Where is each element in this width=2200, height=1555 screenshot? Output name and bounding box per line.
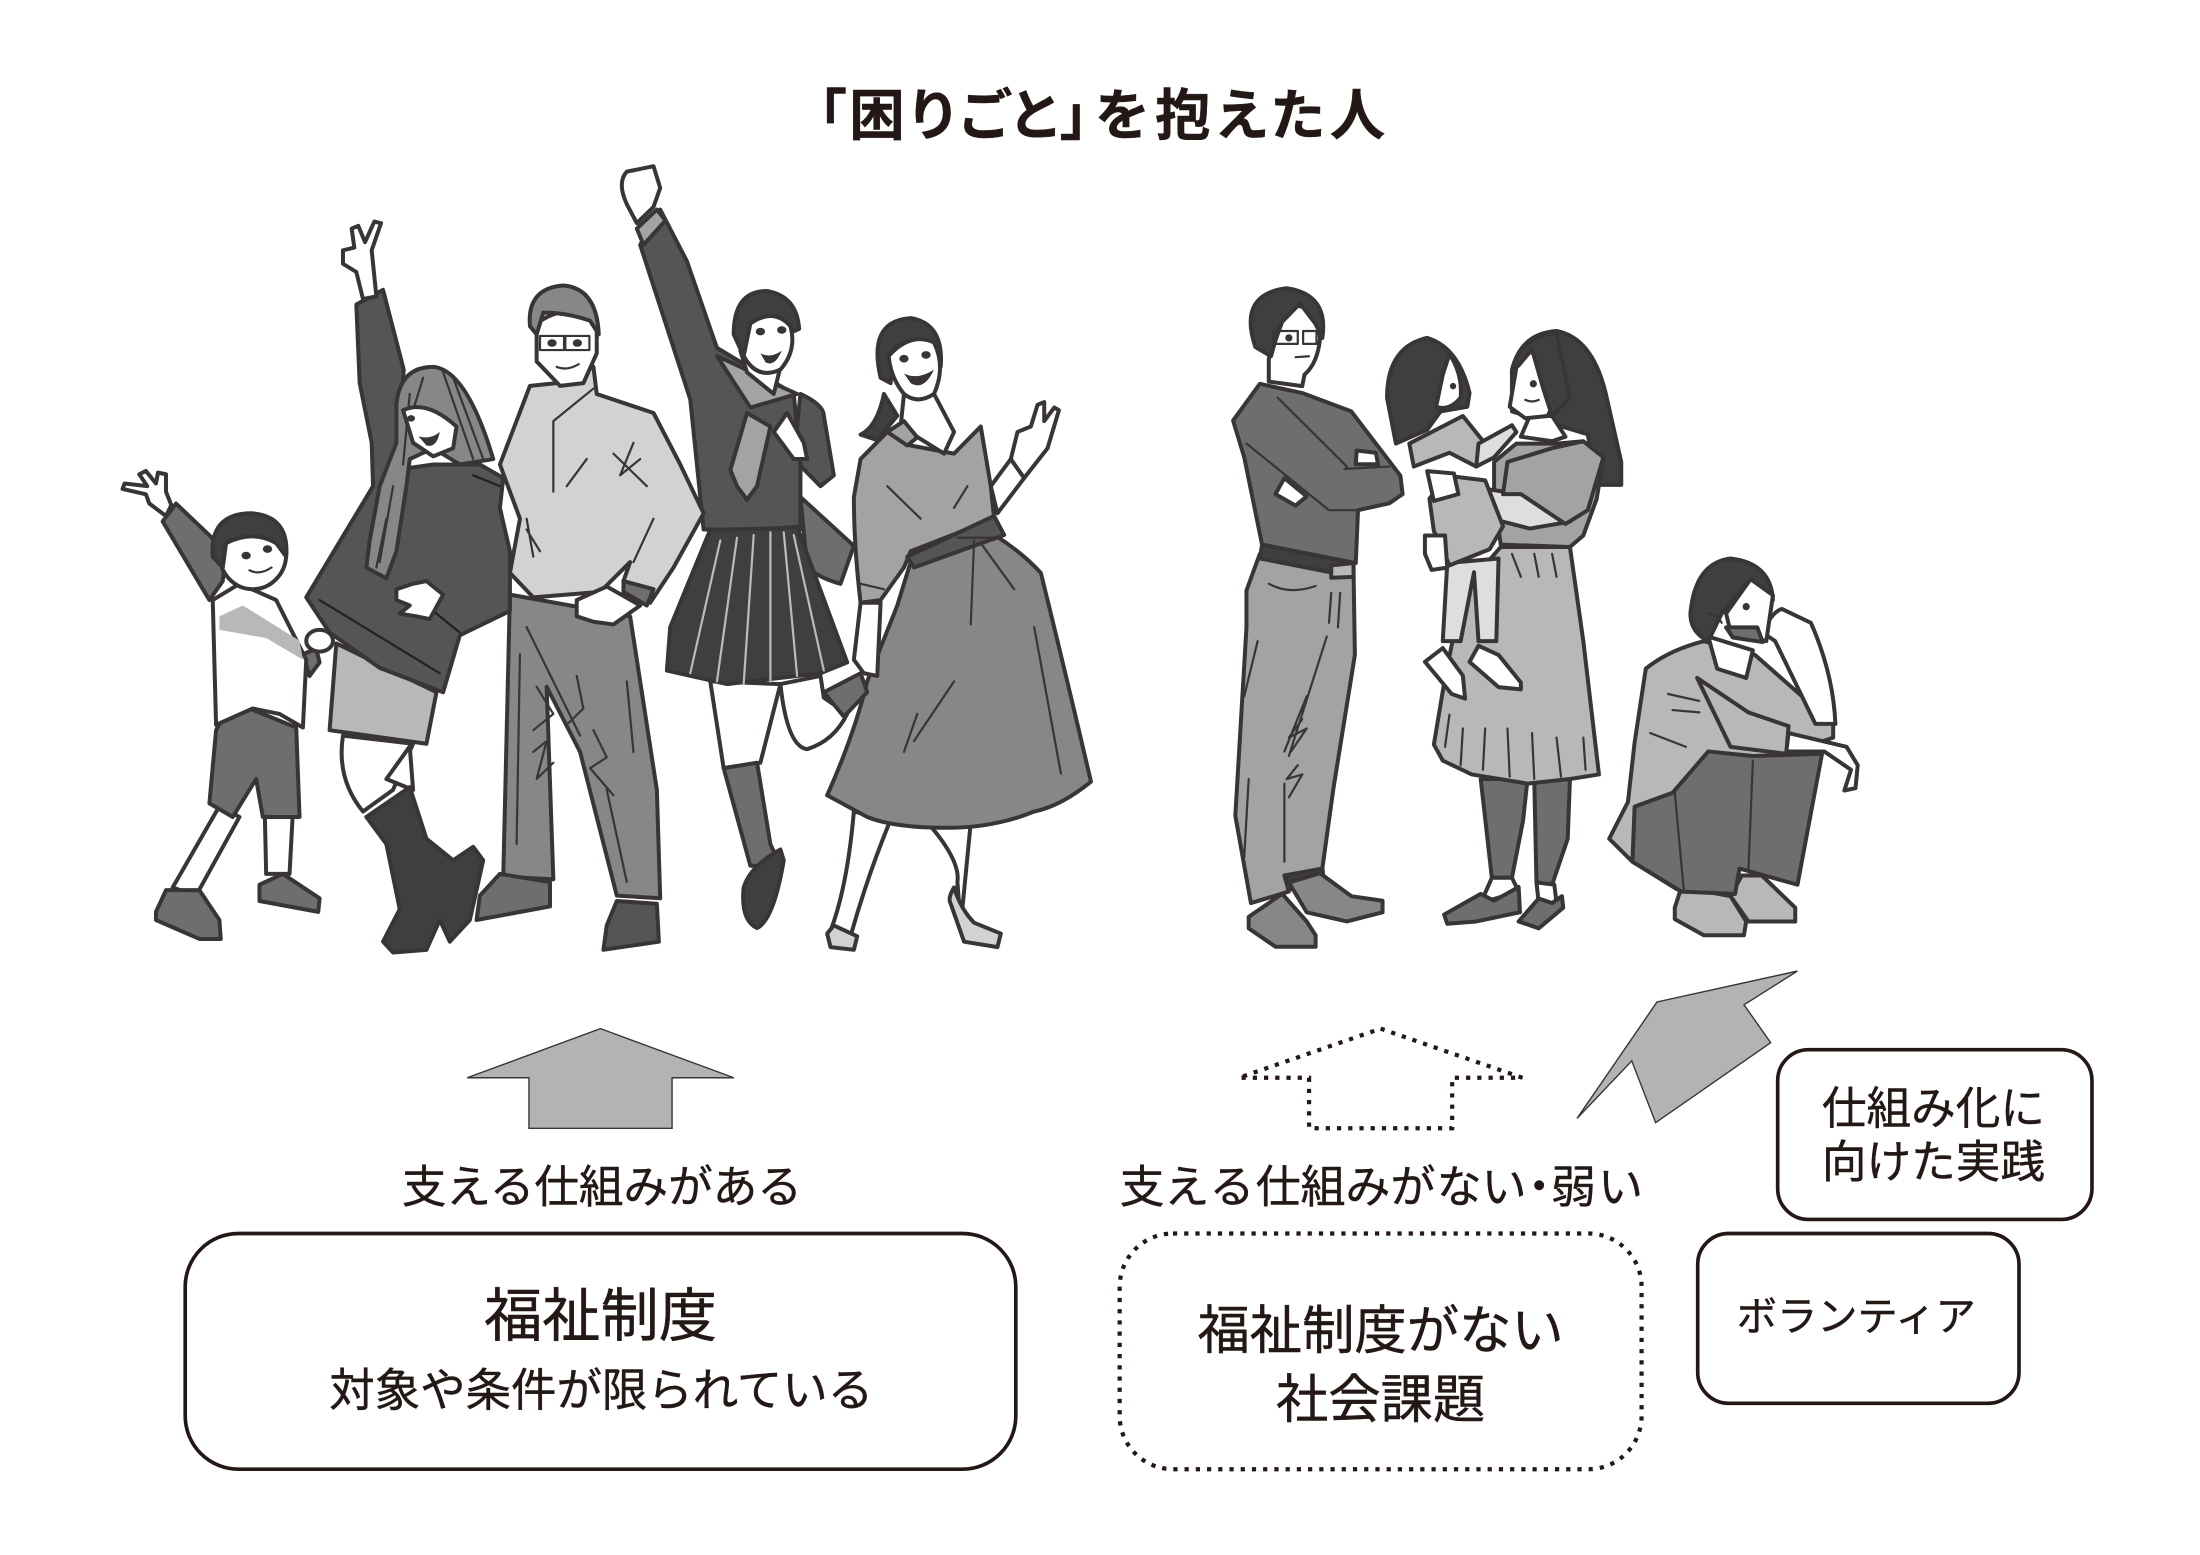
hand on waist xyxy=(396,581,443,619)
arrow: diagonal arrow to people in trouble xyxy=(1577,971,1797,1123)
panel: welfare system xyxy=(185,1233,1016,1469)
panel: social issues without welfare system xyxy=(1120,1233,1642,1469)
text: social issues: 社会課題 xyxy=(1276,1371,1485,1429)
text: practice line 1: 仕組み化に xyxy=(1822,1085,2045,1134)
arrow: up arrow with support xyxy=(467,1029,734,1128)
text: volunteers: ボランティア xyxy=(1737,1294,1976,1339)
figure: child making a peace sign xyxy=(123,471,333,939)
title: 「困りごと」を抱えた人 xyxy=(792,85,1385,147)
text: practice line 2: 向けた実践 xyxy=(1822,1138,2045,1187)
heading: welfare system: 福祉制度 xyxy=(484,1284,717,1349)
illustration: group of people without support xyxy=(1233,288,1858,947)
label: support exists: 支える仕組みがある xyxy=(402,1164,802,1213)
arrow: dotted up arrow without support xyxy=(1239,1029,1522,1128)
figure: woman holding a child xyxy=(1387,331,1621,928)
figure: woman in long skirt xyxy=(827,318,1091,950)
text: limited eligibility: 対象や条件が限られている xyxy=(329,1365,873,1416)
panel: practices toward systems xyxy=(1778,1050,2092,1219)
figure: crouching man resting chin on hand xyxy=(1609,558,1858,935)
label: support absent or weak: 支える仕組みがない・弱い xyxy=(1120,1162,1643,1213)
panel: volunteers xyxy=(1698,1233,2019,1403)
text: no welfare system: 福祉制度がない xyxy=(1197,1303,1564,1361)
illustration: group of people with support xyxy=(123,166,1091,953)
figure: woman with long hair and boots xyxy=(306,222,510,953)
figure: standing man with crossed arms xyxy=(1233,288,1403,947)
figure: schoolgirl with raised fist xyxy=(622,166,867,928)
figure: older man with glasses xyxy=(477,286,704,950)
